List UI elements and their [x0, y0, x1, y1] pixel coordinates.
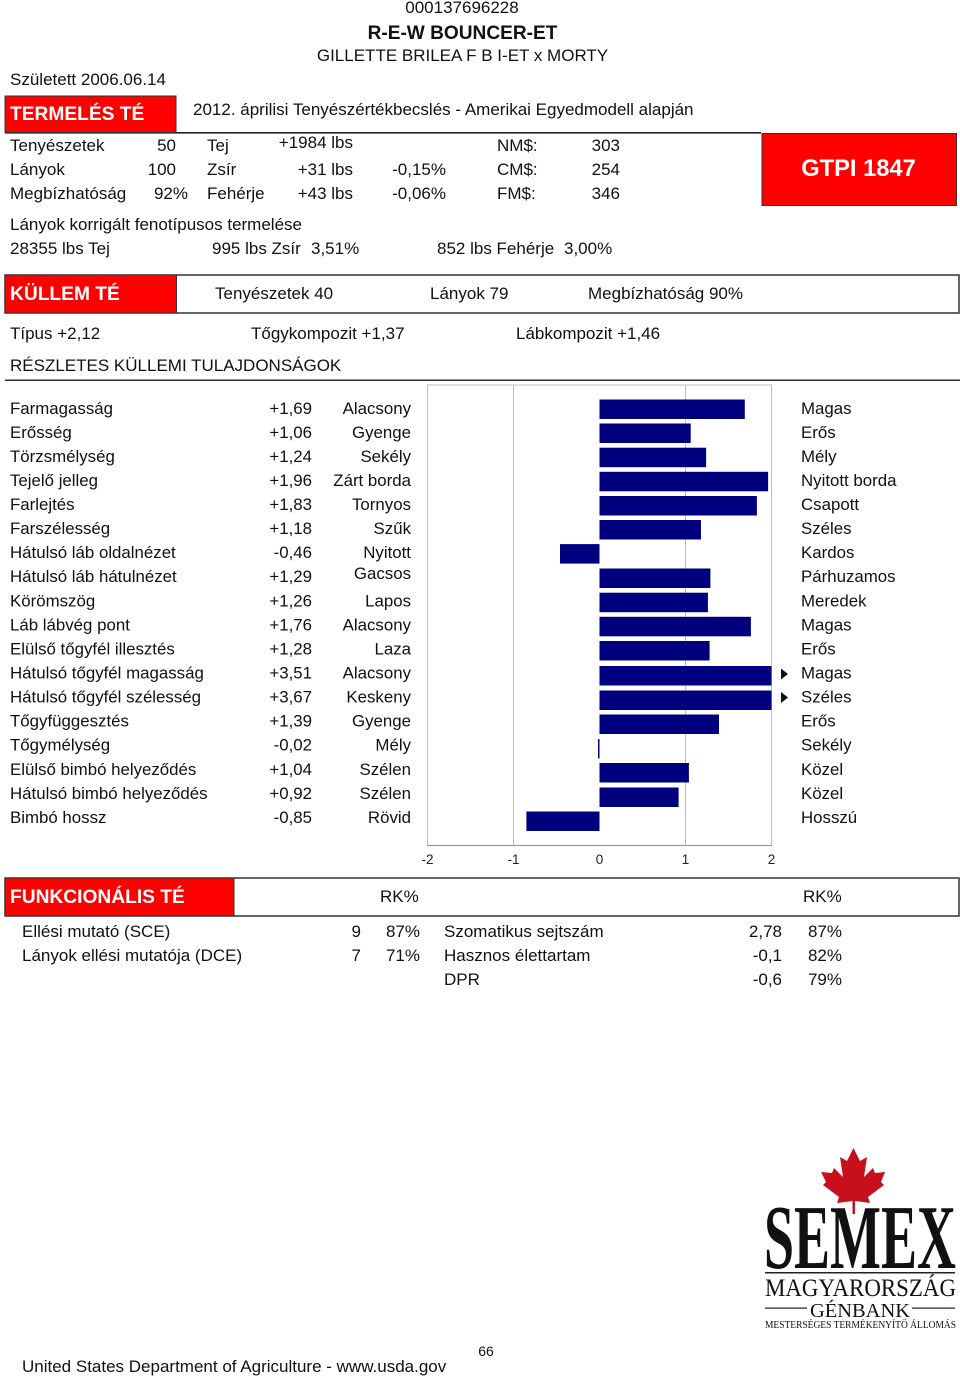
trait names: Tőgymélység [10, 736, 110, 754]
high-end descriptors: Közel [801, 760, 843, 779]
trait values: +1,96 [269, 471, 312, 490]
low-end descriptors: Szűk [374, 519, 412, 538]
production table: +1984 lbs [279, 133, 353, 152]
trait values: +1,83 [269, 495, 312, 514]
trait names: Tőgyfüggesztés [10, 712, 129, 730]
low-end descriptors: Gyenge [352, 423, 411, 442]
trait values: +1,28 [269, 640, 312, 658]
functional table left [22, 922, 420, 965]
production table: +31 lbs [298, 160, 353, 179]
high-end descriptors: Hosszú [801, 808, 857, 827]
logo genbank: GÉNBANK [810, 1299, 911, 1322]
daughters phenotype: Lányok korrigált fenotípusos termelése [10, 215, 302, 234]
functional table right: 2,78 [749, 922, 782, 941]
production table: Lányok [10, 160, 65, 179]
functional table left: 7 [352, 946, 361, 965]
trait names: Törzsmélység [10, 447, 115, 466]
daughters phenotype [10, 215, 612, 258]
icon: maple leaf [821, 1148, 885, 1214]
icon: overflow arrows [781, 668, 788, 703]
trait names: Farszélesség [10, 519, 110, 538]
birth date: Született 2006.06.14 [10, 70, 166, 89]
low-end descriptors: Nyitott [363, 543, 411, 562]
trait values: +1,26 [269, 592, 312, 610]
daughters phenotype: 3,51% [311, 239, 359, 258]
low-end descriptors: Gacsos [354, 564, 411, 583]
high-end descriptors: Párhuzamos [801, 567, 896, 586]
trait names: Hátulsó tőgyfél magasság [10, 664, 204, 682]
production table: 92% [154, 184, 188, 203]
functional table right: Szomatikus sejtszám [444, 922, 604, 941]
high-end descriptors: Széles [801, 688, 852, 706]
high-end descriptors: Sekély [801, 736, 852, 754]
functional table right: 79% [808, 970, 842, 989]
chart axis labels: 0 [596, 852, 603, 867]
trait values: +1,39 [269, 712, 312, 730]
daughters phenotype: 28355 lbs Tej [10, 239, 110, 258]
low-end descriptors: Rövid [368, 808, 411, 827]
high-end descriptors: Csapott [801, 495, 859, 514]
functional table right [444, 922, 842, 989]
high-end descriptors: Magas [801, 399, 852, 418]
page number: 66 [478, 1343, 494, 1359]
trait names: Farmagasság [10, 399, 113, 418]
detailed traits heading: RÉSZLETES KÜLLEMI TULAJDONSÁGOK [10, 356, 342, 375]
functional table left: 87% [386, 922, 420, 941]
functional table right: -0,1 [753, 946, 782, 965]
trait names: Elülső tőgyfél illesztés [10, 640, 175, 658]
trait values: +1,18 [269, 519, 312, 538]
low-end descriptors: Alacsony [343, 664, 412, 682]
composite scores [10, 324, 660, 343]
GTPI callout: GTPI 1847 [801, 156, 916, 182]
functional heading bar: RK% [380, 887, 419, 906]
chart axis labels [421, 852, 775, 867]
low-end descriptors: Laza [374, 640, 412, 658]
pedigree: GILLETTE BRILEA F B I-ET x MORTY [317, 46, 608, 65]
functional table left: Ellési mutató (SCE) [22, 922, 170, 941]
chart axis labels: 2 [768, 852, 775, 867]
conformation heading bar: KÜLLEM TÉ [10, 283, 120, 305]
bar chart: conformation traits [421, 385, 775, 867]
trait values: +1,76 [269, 616, 312, 634]
production table: +43 lbs [298, 184, 353, 203]
high-end descriptors: Erős [801, 640, 836, 658]
production table: 50 [157, 136, 176, 155]
trait names: Bimbó hossz [10, 808, 106, 827]
functional table right: -0,6 [753, 970, 782, 989]
trait names: Hátulsó tőgyfél szélesség [10, 688, 201, 706]
bull name: R-E-W BOUNCER-ET [368, 23, 558, 44]
production heading box [5, 96, 176, 132]
daughters phenotype: 3,00% [564, 239, 612, 258]
functional table left: 71% [386, 946, 420, 965]
trait values [269, 399, 312, 827]
trait values: +0,92 [269, 784, 312, 803]
high-end descriptors: Mély [801, 447, 837, 466]
conformation heading bar: Tenyészetek 40 [215, 284, 333, 303]
trait names: Farlejtés [10, 495, 75, 514]
panel: production [5, 96, 956, 258]
panel: conformation [5, 275, 960, 867]
composite scores: Tőgykompozit +1,37 [251, 324, 405, 343]
functional table left: 9 [352, 922, 361, 941]
trait values: +1,24 [269, 447, 312, 466]
low-end descriptors: Alacsony [343, 399, 412, 418]
functional table left: Lányok ellési mutatója (DCE) [22, 946, 242, 965]
trait values: +1,04 [269, 760, 312, 779]
low-end descriptors: Keskeny [346, 688, 412, 706]
production table: Megbízhatóság [10, 184, 126, 203]
trait names: Tejelő jelleg [10, 471, 98, 490]
panel: functional traits [5, 878, 959, 989]
functional table right: DPR [444, 970, 480, 989]
low-end descriptors: Lapos [365, 592, 411, 610]
low-end descriptors: Szélen [359, 784, 411, 803]
production table: -0,15% [392, 160, 446, 179]
daughters phenotype: 852 lbs Fehérje [437, 239, 554, 258]
production table: NM$: [497, 136, 538, 155]
functional heading bar: FUNKCIONÁLIS TÉ [10, 886, 185, 908]
trait names: Erősség [10, 423, 72, 442]
trait names: Elülső bimbó helyeződés [10, 760, 196, 779]
trait values: +1,69 [269, 399, 312, 418]
chart axis labels: -1 [507, 852, 520, 867]
low-end descriptors: Szélen [359, 760, 411, 779]
trait values: +3,51 [269, 664, 312, 682]
production table: 100 [148, 160, 176, 179]
high-end descriptors [801, 399, 897, 827]
conformation heading bar: Lányok 79 [430, 284, 508, 303]
production table: -0,06% [392, 184, 446, 203]
production table: 254 [592, 160, 620, 179]
production table: 303 [592, 136, 620, 155]
production heading box: TERMELÉS TÉ [10, 103, 145, 125]
trait values: -0,02 [274, 736, 312, 754]
production table: Zsír [207, 160, 237, 179]
trait names [10, 399, 208, 827]
trait names: Hátulsó láb oldalnézet [10, 543, 176, 562]
composite scores: Típus +2,12 [10, 324, 100, 343]
daughters phenotype: 995 lbs Zsír [212, 239, 301, 258]
low-end descriptors: Zárt borda [333, 471, 412, 490]
low-end descriptors: Tornyos [352, 495, 411, 514]
high-end descriptors: Magas [801, 664, 852, 682]
trait values: +3,67 [269, 688, 312, 706]
conformation heading bar [5, 275, 959, 313]
trait values: +1,06 [269, 423, 312, 442]
composite scores: Lábkompozit +1,46 [516, 324, 660, 343]
chart axis labels: 1 [682, 852, 689, 867]
trait values: -0,46 [274, 543, 312, 562]
functional table right: Hasznos élettartam [444, 946, 590, 965]
low-end descriptors: Sekély [360, 447, 412, 466]
trait names: Láb lábvég pont [10, 616, 130, 634]
high-end descriptors: Nyitott borda [801, 471, 897, 490]
trait values: +1,29 [269, 567, 312, 586]
GTPI callout [762, 134, 956, 206]
low-end descriptors [333, 399, 412, 827]
functional table right: 82% [808, 946, 842, 965]
trait values: -0,85 [274, 808, 312, 827]
source footer: United States Department of Agriculture - www.usda.gov [22, 1357, 447, 1376]
trait names: Körömszög [10, 592, 95, 610]
production table: 346 [592, 184, 620, 203]
low-end descriptors: Gyenge [352, 712, 411, 730]
production table: Tenyészetek [10, 136, 105, 155]
conformation heading bar: Megbízhatóság 90% [588, 284, 743, 303]
header: animal identification [10, 0, 608, 89]
high-end descriptors: Széles [801, 519, 852, 538]
high-end descriptors: Erős [801, 712, 836, 730]
trait names: Hátulsó láb hátulnézet [10, 567, 177, 586]
functional table right: 87% [808, 922, 842, 941]
functional heading bar [5, 878, 959, 916]
high-end descriptors: Kardos [801, 543, 854, 562]
high-end descriptors: Közel [801, 784, 843, 803]
low-end descriptors: Mély [375, 736, 412, 754]
high-end descriptors: Meredek [801, 592, 867, 610]
logo: Semex Magyarország [764, 1148, 956, 1331]
high-end descriptors: Magas [801, 616, 852, 634]
production table: FM$: [497, 184, 536, 203]
evaluation note: 2012. áprilisi Tenyészértékbecslés - Amerikai Egyedmodell alapján [193, 100, 694, 119]
production table: CM$: [497, 160, 538, 179]
production table [10, 133, 620, 203]
functional heading bar: RK% [803, 887, 842, 906]
high-end descriptors: Erős [801, 423, 836, 442]
production table: Tej [207, 136, 229, 155]
production table: Fehérje [207, 184, 265, 203]
chart axis labels: -2 [421, 852, 434, 867]
trait names: Hátulsó bimbó helyeződés [10, 784, 208, 803]
low-end descriptors: Alacsony [343, 616, 412, 634]
production header rule [5, 132, 761, 134]
